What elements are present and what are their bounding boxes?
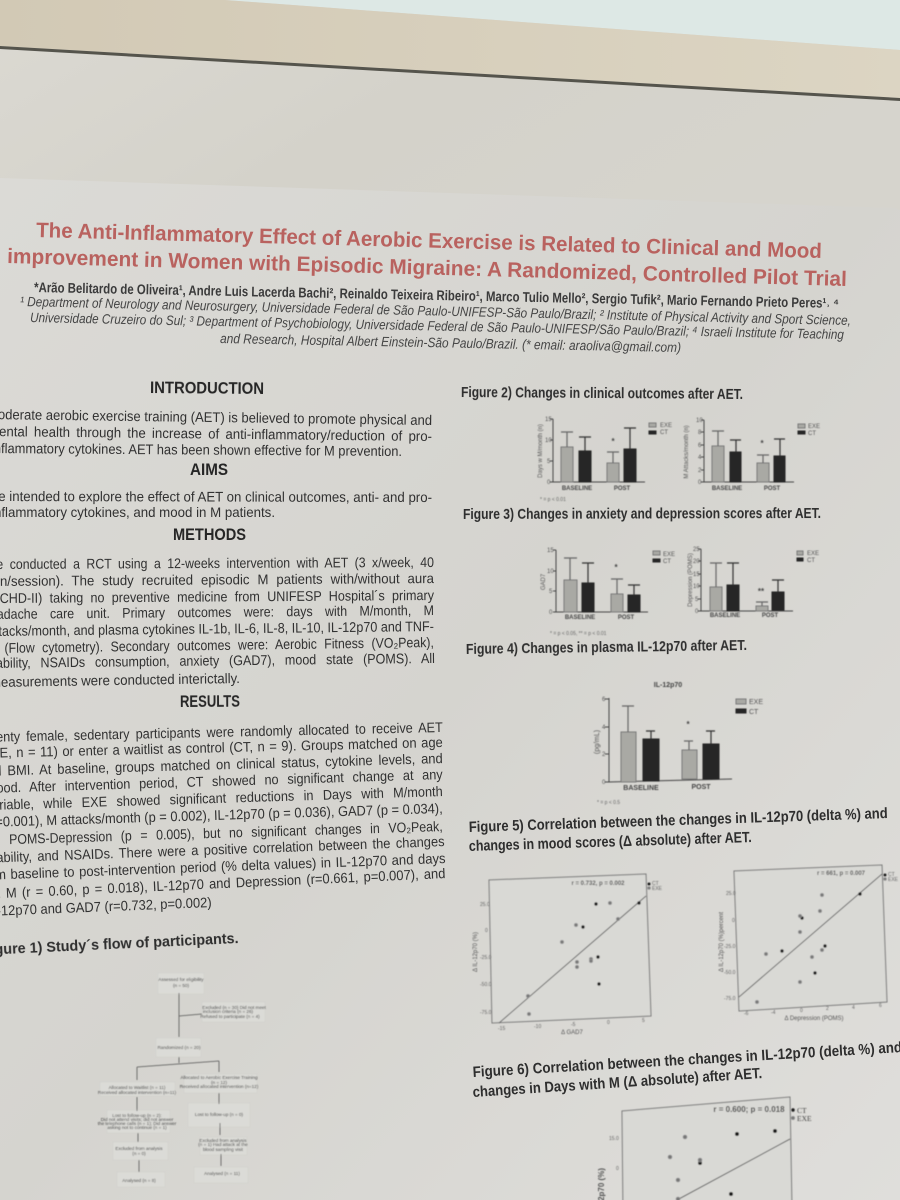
bar chart: GAD7 anxiety: * [614,563,618,572]
text block: methods: attacks/month, and plasma cytokines IL-1b, IL-6, IL-8, IL-10, IL-12p70 and TNF- [0,618,434,639]
text block: methods: α (Flow cytometry). Secondary outcomes were: Aerobic Fitness (VO₂Peak), [0,634,434,656]
bar chart: POMS depression: 20 [693,559,700,565]
chart: participant flow diagram: Did not attend visits; did not answer [101,1117,174,1122]
scatter plot: IL-12p70 vs days with migraine: 0 [616,1166,619,1172]
chart: participant flow diagram: asking not to continue (n = 1) [107,1125,167,1130]
chart: participant flow diagram: Excluded from analysis [199,1138,247,1143]
text block: results: variable, while EXE showed significant reductions in Days with M/month [0,783,443,813]
scatter plot: IL-12p70 vs depression: -6 [744,1011,749,1017]
bar chart: days with migraine per month: EXE [660,423,672,429]
scatter plot: IL-12p70 vs depression: -4 [771,1010,776,1016]
chart: participant flow diagram: Analysed (n = 8) [122,1178,156,1183]
scatter plot: IL-12p70 vs GAD7: EXE [652,886,663,892]
bar chart: migraine attacks per month: * [760,439,764,448]
bar chart: migraine attacks per month: BASELINE [712,486,742,492]
bar chart: migraine attacks per month: POST [764,486,780,492]
scatter plot: IL-12p70 vs depression: -75.0 [724,996,736,1002]
bar chart: plasma IL-12p70: IL-12p70 [654,682,682,689]
chart: participant flow diagram: Assessed for eligibility [158,977,204,982]
text block: introduction [0,406,432,459]
bar chart: days with migraine per month: 15 [545,417,552,423]
scatter plot: IL-12p70 vs depression [719,865,899,1022]
bar chart: POMS depression: 5 [695,597,699,603]
scatter plot: IL-12p70 vs GAD7: r = 0.732, p = 0.002 [571,881,625,887]
title: improvement in Women with Episodic Migraine: A Randomized, Controlled Pilot Trial [7,245,847,291]
heading: figure 4: Figure 4) Changes in plasma IL-12p70 after AET. [466,637,747,658]
bar chart: plasma IL-12p70: 2 [602,752,606,758]
scatter plot: IL-12p70 vs GAD7: 25.0 [480,902,490,908]
bar chart: migraine attacks per month: 4 [698,455,702,461]
scatter plot: IL-12p70 vs depression: 25.0 [726,891,736,897]
scatter plot: IL-12p70 vs days with migraine: r = 0.600; p = 0.018 [713,1105,785,1114]
bar chart: plasma IL-12p70: (pg/mL) [594,730,601,754]
heading: figure 3: Figure 3) Changes in anxiety and depression scores after AET. [463,505,821,523]
bar chart: days with migraine per month: * [611,437,615,446]
bar chart: plasma IL-12p70 [594,682,763,806]
bar chart: POMS depression: 15 [693,572,700,578]
heading: methods: METHODS [173,526,246,544]
scatter plot: IL-12p70 vs GAD7: Δ GAD7 [561,1030,584,1036]
chart: participant flow diagram: the telephone calls (n = 1); Did answer [98,1121,177,1126]
scatter plot: IL-12p70 vs GAD7: -5 [571,1022,576,1028]
bar chart: GAD7 anxiety: POST [618,615,634,621]
scatter plot: IL-12p70 vs GAD7 [473,874,663,1036]
title [7,219,847,291]
chart: participant flow diagram: Randomized (n = 20) [157,1045,201,1050]
chart: participant flow diagram: Analysed (n = 11) [204,1171,240,1176]
bar chart: GAD7 anxiety: BASELINE [565,615,595,621]
bar chart: plasma IL-12p70: BASELINE [623,785,659,792]
chart: participant flow diagram: Excluded from analysis [115,1146,163,1151]
bar chart: GAD7 anxiety: 15 [547,548,554,554]
bar chart: GAD7 anxiety: 10 [547,569,554,575]
bar chart: GAD7 anxiety: CT [663,559,671,565]
bar chart: POMS depression: 0 [695,609,699,615]
bar chart: plasma IL-12p70: CT [749,709,759,716]
chart: participant flow diagram: Received allocated intervention (n=11) [98,1090,177,1095]
scatter plot: IL-12p70 vs depression: r = 661, p = 0.007 [817,871,866,877]
chart: participant flow diagram: inclusion criteria (n = 26) [203,1009,254,1014]
bar chart: days with migraine per month: POST [614,486,630,492]
background: sky [225,0,900,50]
text block: introduction: inflammatory cytokines. AET has been shown effective for M prevention. [0,440,402,459]
bar chart: GAD7 anxiety: EXE [663,552,675,558]
bar chart: plasma IL-12p70: 0 [602,780,606,786]
scatter plot: IL-12p70 vs depression: -50.0 [724,970,736,976]
bar chart: POMS depression: 25 [693,547,700,553]
text block: results [0,719,446,919]
bar chart: POMS depression [688,547,819,619]
chart: participant flow diagram: Refused to participate (n = 4) [200,1014,260,1019]
affiliations: and Research, Hospital Albert Einstein-São Paulo/Brazil. (* email: araoliva@gmail.com) [220,331,681,355]
scatter plot: IL-12p70 vs GAD7: -75.0 [480,1010,492,1016]
bar chart: GAD7 anxiety: GAD7 [541,573,547,590]
scatter plot: IL-12p70 vs GAD7: -15 [498,1026,505,1032]
scatter plot: IL-12p70 vs depression: 4 [852,1005,855,1011]
bar chart: POMS depression: EXE [807,551,819,557]
scatter plot: IL-12p70 vs depression: 0 [800,1008,803,1014]
chart: participant flow diagram: Received allocated intervention (n=12) [180,1084,259,1089]
scatter plot: IL-12p70 vs depression: 0 [732,918,735,924]
bar chart: migraine attacks per month: M Attacks/month (n) [684,425,690,479]
chart: participant flow diagram: (n = 1) Had attack at the [198,1142,248,1147]
bar chart: days with migraine per month: Days w M/month (n) [538,424,544,478]
bar chart: days with migraine per month: 10 [545,438,552,444]
bar chart: GAD7 anxiety: * = p < 0.05, ** = p < 0.01 [550,631,607,637]
bar chart: days with migraine per month: CT [660,430,668,436]
text block: methods [0,554,435,690]
scatter plot: IL-12p70 vs depression: Δ IL-12p70 (%)percent [719,912,725,972]
text block: aims [0,488,432,520]
bar chart: migraine attacks per month: 0 [698,480,702,486]
heading: results: RESULTS [180,693,240,711]
bar chart: GAD7 anxiety [541,548,675,637]
heading: aims: AIMS [190,461,228,479]
scatter plot: IL-12p70 vs depression: Δ Depression (POMS) [784,1016,844,1022]
text block: methods: min/session). The study recruited episodic M patients with/without aura [0,570,434,589]
bar chart: days with migraine per month: 0 [547,480,551,486]
bar chart: migraine attacks per month: CT [808,431,816,437]
bar chart: POMS depression: ** [758,587,765,596]
bar chart: plasma IL-12p70: POST [691,784,711,791]
bar chart: POMS depression: BASELINE [710,613,740,619]
scatter plot: IL-12p70 vs GAD7: 0 [607,1020,610,1026]
bar chart: days with migraine per month: * = p < 0.01 [540,497,566,503]
bar chart: plasma IL-12p70: 4 [602,725,606,731]
affiliations [20,294,851,355]
scatter plot: IL-12p70 vs depression: EXE [888,877,899,883]
bar chart: POMS depression: 10 [693,584,700,590]
bar chart: POMS depression: POST [762,613,778,619]
chart: participant flow diagram: Lost to follow-up (n = 2): [112,1113,162,1118]
scatter plot: IL-12p70 vs GAD7: CT [652,881,659,887]
chart: participant flow diagram: Allocated to Waitlist (n = 11) [109,1085,166,1090]
scatter plot: IL-12p70 vs GAD7: -25.0 [480,955,492,961]
bar chart: migraine attacks per month: 2 [698,468,702,474]
bar chart: plasma IL-12p70: * [686,720,690,729]
bar chart: plasma IL-12p70: EXE [749,699,763,706]
heading: figure 6: changes in Days with M (Δ absolute) after AET. [472,1065,763,1101]
background: poster board [0,49,900,215]
chart: participant flow diagram: (n = 12) [211,1080,227,1085]
bar chart: migraine attacks per month: 8 [698,430,702,436]
chart: participant flow diagram: Lost to follow-up (n = 0) [195,1112,244,1117]
bar chart: POMS depression: Depression (POMS) [688,553,694,607]
scatter plot: IL-12p70 vs GAD7: Δ IL-12p70 (%) [473,932,479,972]
heading: figure 5 [469,805,888,855]
chart: participant flow diagram: blood sampling visit [203,1147,244,1152]
scatter plot: IL-12p70 vs depression: 2 [826,1006,829,1012]
bar chart: days with migraine per month: BASELINE [562,486,592,492]
text block: introduction: mental health through the increase of anti-inflammatory/reduction of pro- [0,423,432,444]
bar chart: POMS depression: CT [807,558,815,564]
text block: methods: (ICHD-II) taking no preventive medicine from UNIFESP Hospital´s primary [0,587,434,606]
scatter plot: IL-12p70 vs days with migraine [597,1097,812,1200]
bar chart: GAD7 anxiety: 5 [549,589,553,595]
bar chart: migraine attacks per month: 10 [696,418,703,424]
bar chart: days with migraine per month [538,417,672,503]
scatter plot: IL-12p70 vs GAD7: -10 [534,1024,541,1030]
bar chart: migraine attacks per month [684,418,820,492]
heading: figure 6 [472,1039,900,1101]
text block: introduction: Moderate aerobic exercise training (AET) is believed to promote physical and [0,406,432,428]
bar chart: days with migraine per month: 5 [547,459,551,465]
scatter plot: IL-12p70 vs GAD7: 5 [642,1018,645,1024]
heading: introduction: INTRODUCTION [150,379,264,398]
bar chart: migraine attacks per month: 6 [698,443,702,449]
scatter plot: IL-12p70 vs days with migraine: 15.0 [609,1136,619,1142]
scatter plot: IL-12p70 vs depression: 6 [879,1003,882,1009]
text block: methods: We conducted a RCT using a 12-weeks intervention with AET (3 x/week, 40 [0,554,434,572]
chart: participant flow diagram: (n = 50) [173,983,189,988]
text block: results: mood. After intervention period, CT showed no significant change at any [0,766,443,796]
title: The Anti-Inflammatory Effect of Aerobic Exercise is Related to Clinical and Mood [36,219,822,263]
scatter plot: IL-12p70 vs days with migraine: EXE [797,1114,812,1123]
scatter plot: IL-12p70 vs depression: CT [888,872,895,878]
bar chart: plasma IL-12p70: 6 [602,697,606,703]
heading: figure 5: changes in mood scores (Δ absolute) after AET. [469,829,752,855]
text block: aims: We intended to explore the effect of AET on clinical outcomes, anti- and pro- [0,488,432,505]
chart: participant flow diagram: Allocated to Aerobic Exercise Training [180,1075,258,1080]
bar chart: plasma IL-12p70: * = p < 0.5 [597,800,620,806]
bar chart: GAD7 anxiety: 0 [549,610,553,616]
scatter plot: IL-12p70 vs days with migraine: CT [797,1106,807,1115]
scatter plot: IL-12p70 vs GAD7: 0 [485,928,488,934]
bar chart: migraine attacks per month: EXE [808,424,820,430]
chart: participant flow diagram: (n = 0) [132,1151,146,1156]
heading: figure 2: Figure 2) Changes in clinical outcomes after AET. [461,384,743,403]
scatter plot: IL-12p70 vs GAD7: -50.0 [480,982,492,988]
chart: participant flow diagram [98,973,266,1187]
scatter plot: IL-12p70 vs depression: -25.0 [724,944,736,950]
chart: participant flow diagram: Excluded (n = 30) Did not meet [202,1005,266,1010]
background: top frame beam [0,0,900,98]
